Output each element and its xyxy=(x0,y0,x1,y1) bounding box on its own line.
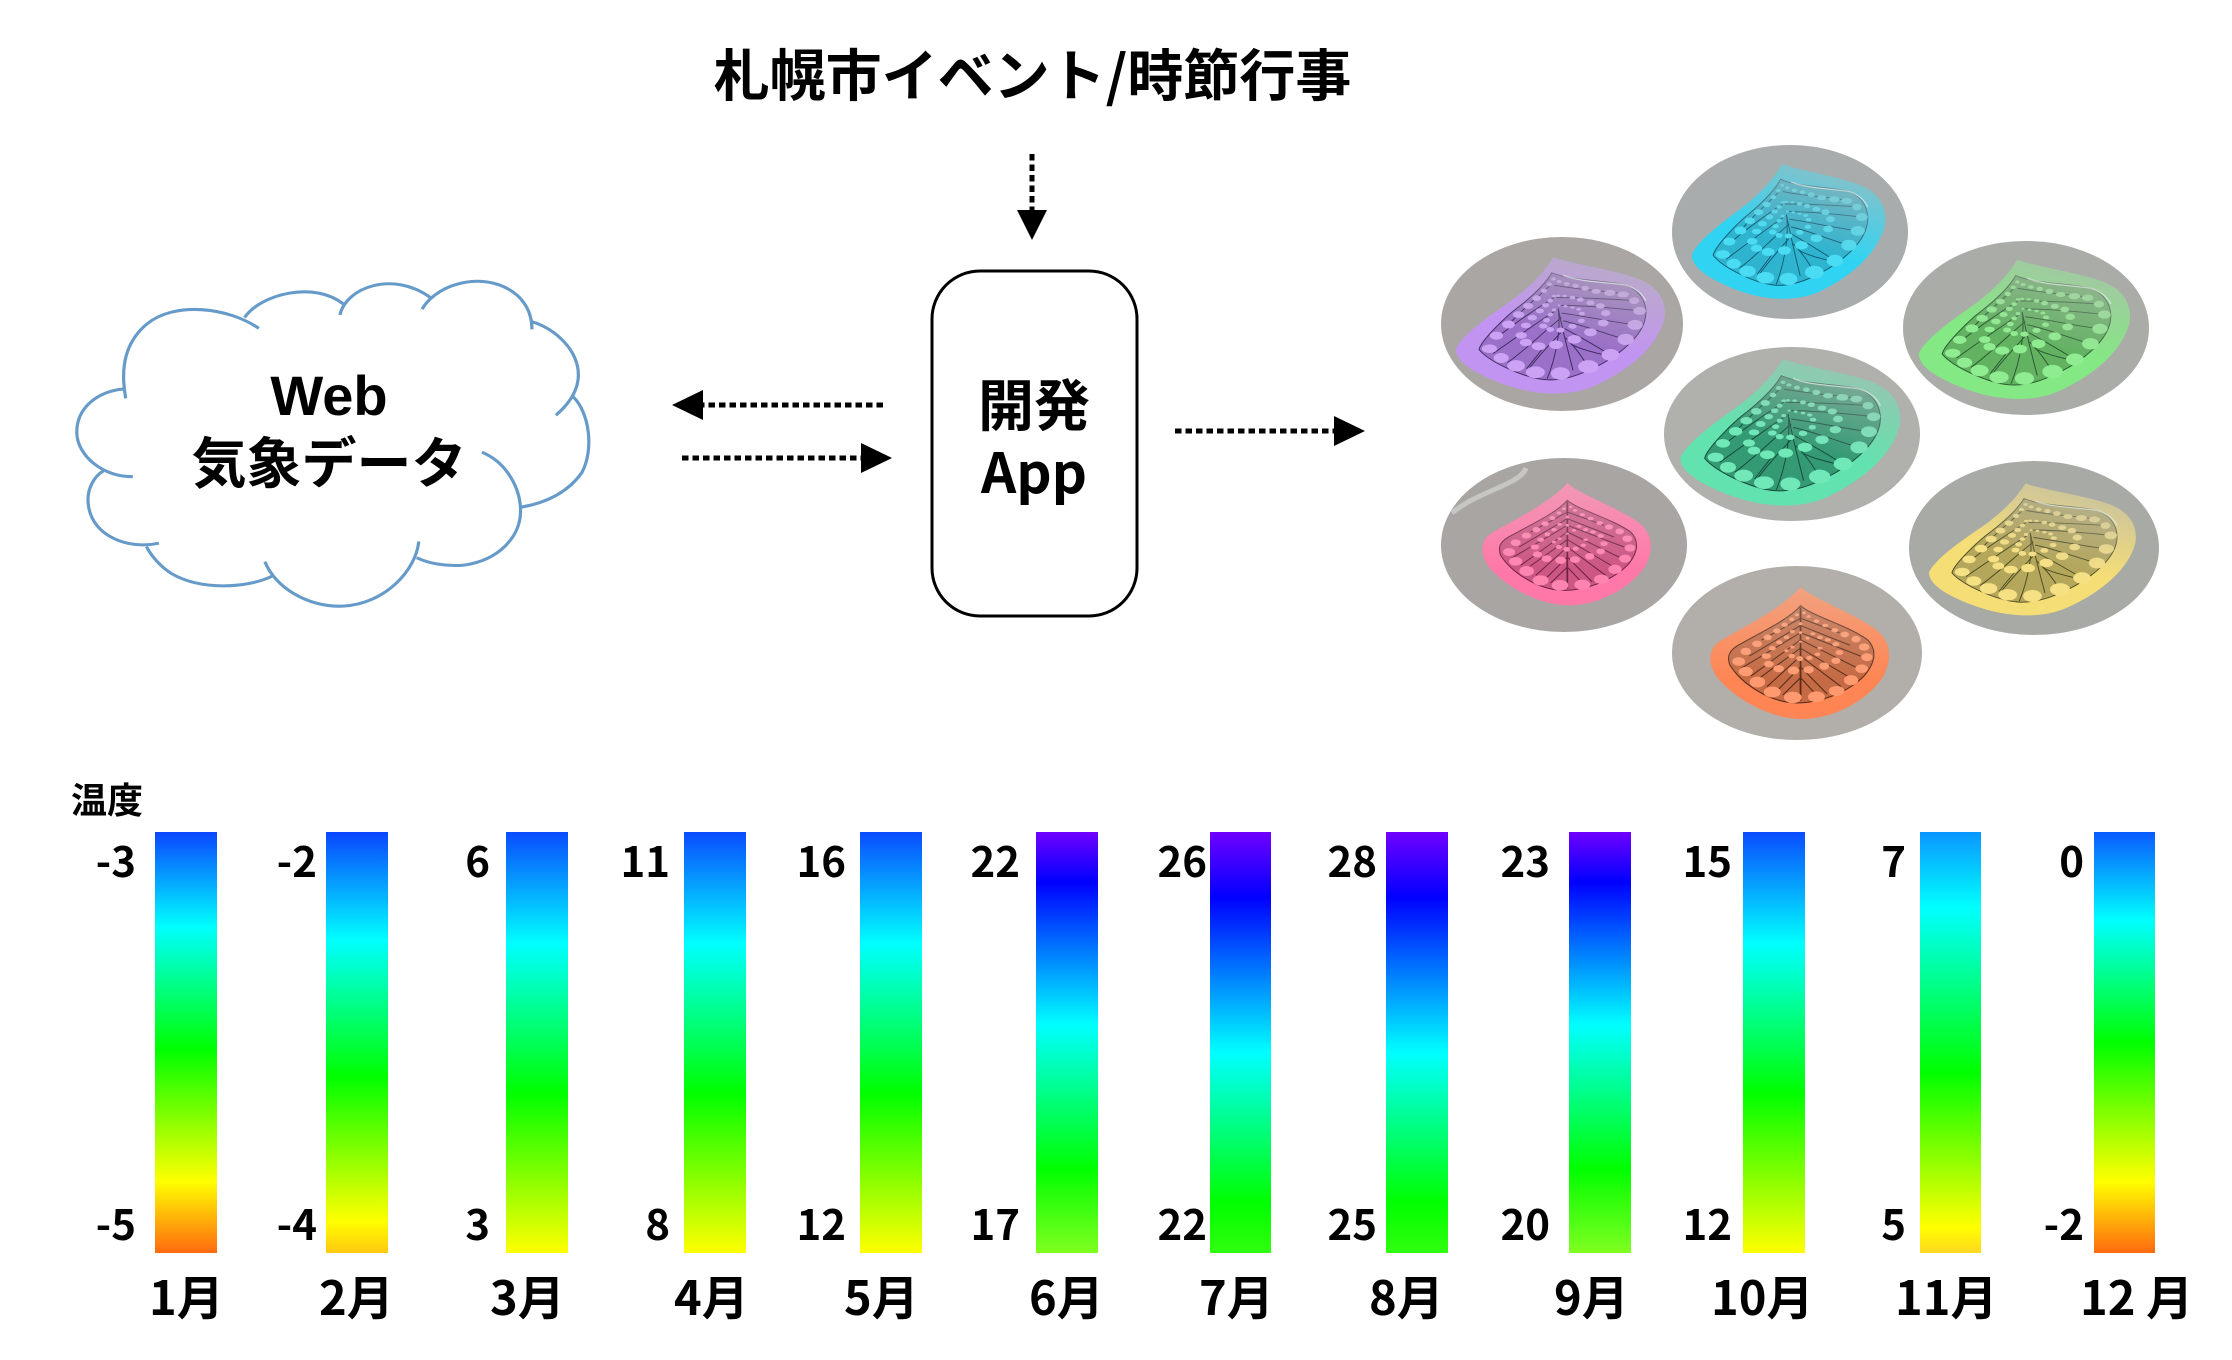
bar: April: 4月 xyxy=(674,1260,749,1329)
bar: January: -3 xyxy=(96,829,136,890)
bar: January: -5 xyxy=(96,1192,136,1253)
bar: December: 0 xyxy=(2059,829,2084,890)
bar: January xyxy=(96,829,224,1329)
bar: November xyxy=(1881,829,1997,1329)
bar: December: 12 月 xyxy=(2080,1260,2193,1329)
bar: August xyxy=(1327,829,1448,1329)
bar: October: 12 xyxy=(1682,1192,1732,1253)
bar: July: 7月 xyxy=(1199,1260,1274,1329)
bar: April xyxy=(620,829,749,1329)
title: 札幌市イベント/時節行事 xyxy=(714,32,1351,113)
bar: May: 16 xyxy=(796,829,846,890)
leaf: orange xyxy=(1672,566,1922,740)
leaf: yellow xyxy=(1909,461,2159,635)
leaf: purple xyxy=(1441,237,1683,411)
bar: May: 5月 xyxy=(844,1260,919,1329)
bar: February xyxy=(277,829,394,1329)
bar: June: 6月 xyxy=(1029,1260,1104,1329)
bar: October: 10月 xyxy=(1711,1260,1813,1329)
bar: July: 22 xyxy=(1157,1192,1207,1253)
bar: July xyxy=(1157,829,1274,1329)
bar: March: 3 xyxy=(465,1192,490,1253)
bar: January: 1月 xyxy=(149,1260,224,1329)
bar: July: 26 xyxy=(1157,829,1207,890)
label: temperature: 温度 xyxy=(71,772,143,824)
bar: October: 15 xyxy=(1682,829,1732,890)
bar: December: -2 xyxy=(2044,1192,2084,1253)
bar: October xyxy=(1682,829,1813,1329)
bar: August: 8月 xyxy=(1369,1260,1444,1329)
bar: August: 25 xyxy=(1327,1192,1377,1253)
bar: April: 8 xyxy=(645,1192,670,1253)
cloud: web weather data: Web xyxy=(270,364,388,427)
bar: February: 2月 xyxy=(319,1260,394,1329)
bar: November: 7 xyxy=(1881,829,1906,890)
bar: September: 20 xyxy=(1500,1192,1550,1253)
bar: May: 12 xyxy=(796,1192,846,1253)
cloud: web weather data: 気象データ xyxy=(191,419,467,499)
bar: June xyxy=(970,829,1104,1329)
leaf: green xyxy=(1903,241,2149,415)
bar: November: 5 xyxy=(1881,1192,1906,1253)
panel: app box: 開発 xyxy=(978,362,1090,443)
leaf: blue xyxy=(1672,145,1908,319)
arrow: app to web xyxy=(672,390,883,420)
bar: November: 11月 xyxy=(1895,1260,1997,1329)
bar: March: 3月 xyxy=(490,1260,565,1329)
arrow: events to app xyxy=(1017,154,1047,240)
bar: March xyxy=(465,829,568,1329)
panel: app box: App xyxy=(980,429,1087,509)
bar: May xyxy=(796,829,922,1329)
bar: February: -4 xyxy=(277,1192,317,1253)
bar: December xyxy=(2044,829,2193,1329)
bar: September: 9月 xyxy=(1554,1260,1629,1329)
bar: September xyxy=(1500,829,1631,1329)
bar: April: 11 xyxy=(620,829,670,890)
arrow: web to app xyxy=(682,443,892,473)
bar: June: 22 xyxy=(970,829,1020,890)
panel: app box xyxy=(932,271,1137,616)
bar: February: -2 xyxy=(277,829,317,890)
bar: March: 6 xyxy=(465,829,490,890)
leaf: pink xyxy=(1441,458,1687,632)
cloud: web weather data xyxy=(77,281,589,606)
bar: June: 17 xyxy=(970,1192,1020,1253)
bar: August: 28 xyxy=(1327,829,1377,890)
arrow: app to leaves xyxy=(1175,416,1365,446)
image: lit leaf panels xyxy=(1441,145,2159,740)
chart: monthly temperature color bars xyxy=(96,829,2193,1329)
bar: September: 23 xyxy=(1500,829,1550,890)
leaf: teal xyxy=(1664,347,1920,521)
